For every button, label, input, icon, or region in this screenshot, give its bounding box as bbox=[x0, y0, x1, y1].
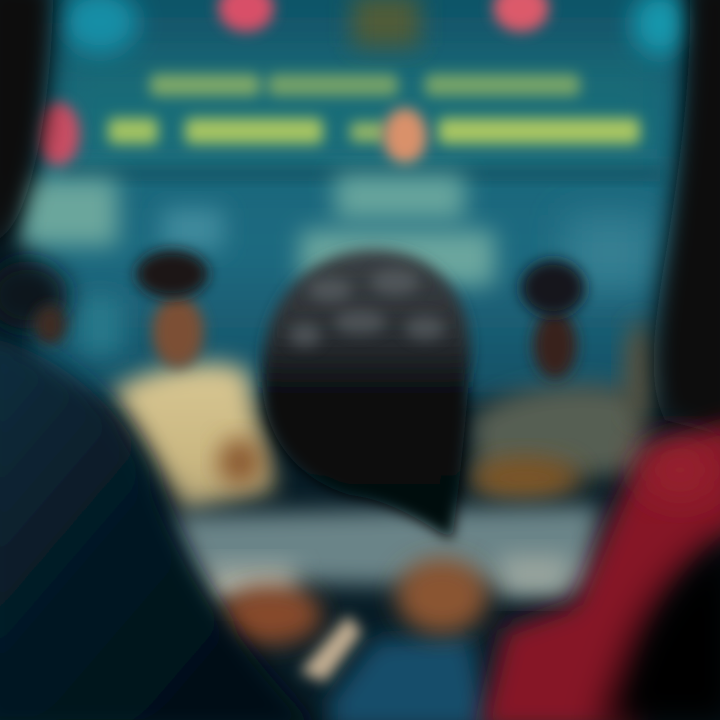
icon: cyan corner circle right bbox=[632, 0, 688, 56]
silhouette: foreground head with curly hair bbox=[262, 250, 470, 540]
panel: lower left board block bbox=[78, 295, 123, 355]
panel: centre lower pale info block bbox=[300, 230, 495, 286]
clothing: blue jeans lower centre bbox=[330, 635, 490, 720]
silhouette: right dark figure bbox=[654, 0, 720, 440]
icon: pink circle top right bbox=[493, 0, 549, 32]
icon: pink circle left side bbox=[36, 102, 80, 166]
person: right seated in grey shirt bbox=[470, 260, 656, 500]
panel: small blue info block bbox=[162, 208, 224, 250]
silhouette: top left dark head bbox=[0, 0, 54, 250]
icon: pink circle top left bbox=[218, 0, 274, 32]
icon: olive emblem top centre bbox=[352, 0, 420, 47]
silhouette: foreground shoulder left bbox=[0, 335, 320, 720]
hands: foreground hand right bbox=[396, 558, 488, 634]
silhouette: background person far left bbox=[0, 261, 68, 345]
panel: left pale info block bbox=[20, 178, 118, 246]
panel: right pale info block bbox=[565, 215, 655, 290]
panel: centre pale info block bbox=[335, 174, 465, 220]
clothing: red sleeve right bbox=[480, 420, 720, 720]
person: left seated in beige shirt bbox=[112, 250, 275, 512]
table: pale surface with papers bbox=[170, 505, 600, 605]
heading: blurred title lines bbox=[108, 74, 640, 144]
icon: orange centre circle bbox=[383, 108, 427, 164]
icon: cyan corner circle left bbox=[62, 0, 138, 54]
hands: foreground hand left bbox=[218, 585, 362, 682]
